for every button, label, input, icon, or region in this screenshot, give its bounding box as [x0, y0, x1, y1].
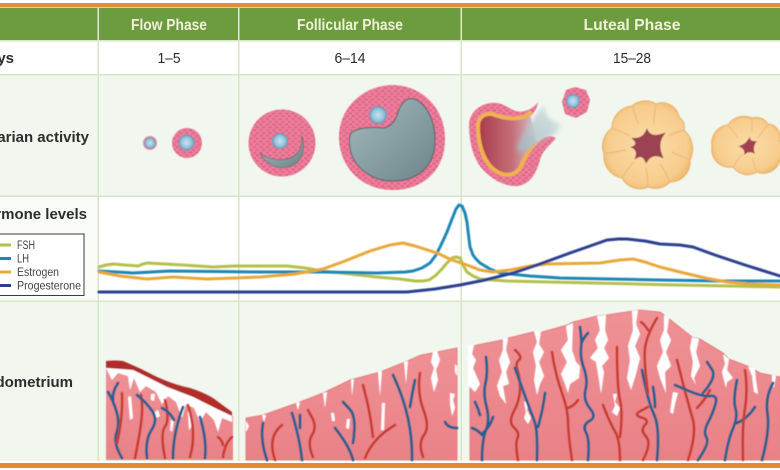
panel: ovarian activity illustrations: [143, 85, 780, 190]
day range: flow: 1–5: [158, 51, 180, 67]
icon: secondary follicle: [248, 110, 316, 176]
legend: [0, 234, 84, 296]
heading: flow phase: Flow Phase: [131, 17, 207, 34]
ovulation release wisp: [516, 105, 563, 152]
top orange rule: [0, 3, 780, 8]
flow blood vessels: [108, 383, 232, 458]
heading: luteal phase: Luteal Phase: [584, 17, 681, 34]
icon: mature follicle: [339, 85, 445, 190]
panel: endometrium follicular phase: [246, 348, 457, 460]
bottom orange rule: [0, 463, 780, 468]
legend entry: FSH: FSH: [17, 240, 35, 252]
icon: corpus luteum: [603, 101, 693, 189]
follicular blood vessels: [262, 373, 457, 460]
day range: luteal: 15–28: [613, 51, 651, 67]
line: estrogen: [99, 243, 780, 285]
icon: ruptured follicle: [469, 102, 563, 186]
panel: endometrium luteal phase: [468, 310, 780, 460]
line: progesterone: [99, 239, 780, 292]
luteal gland gaps: [468, 310, 776, 404]
shedding crust: [106, 360, 232, 416]
icon: released oocyte: [562, 87, 590, 118]
icon: primordial follicle: [143, 136, 157, 150]
icon: regressing corpus luteum: [712, 116, 780, 175]
shedding white gaps: [106, 368, 232, 432]
luteal blood vessels: [472, 318, 773, 460]
heading: follicular phase: Follicular Phase: [297, 17, 403, 34]
legend entry: LH: LH: [17, 254, 29, 266]
line: LH: [99, 205, 780, 281]
line: FSH: [99, 257, 780, 287]
legend entry: estrogen: Estrogen: [17, 267, 59, 279]
legend entry: progesterone: Progesterone: [17, 280, 81, 292]
header row: [0, 8, 780, 40]
chart: hormone levels: [99, 205, 780, 292]
icon: primary follicle: [172, 128, 202, 158]
follicular gland gaps: [246, 351, 457, 432]
panel: endometrium flow phase: [106, 360, 233, 460]
day range: follicular: 6–14: [334, 51, 366, 67]
